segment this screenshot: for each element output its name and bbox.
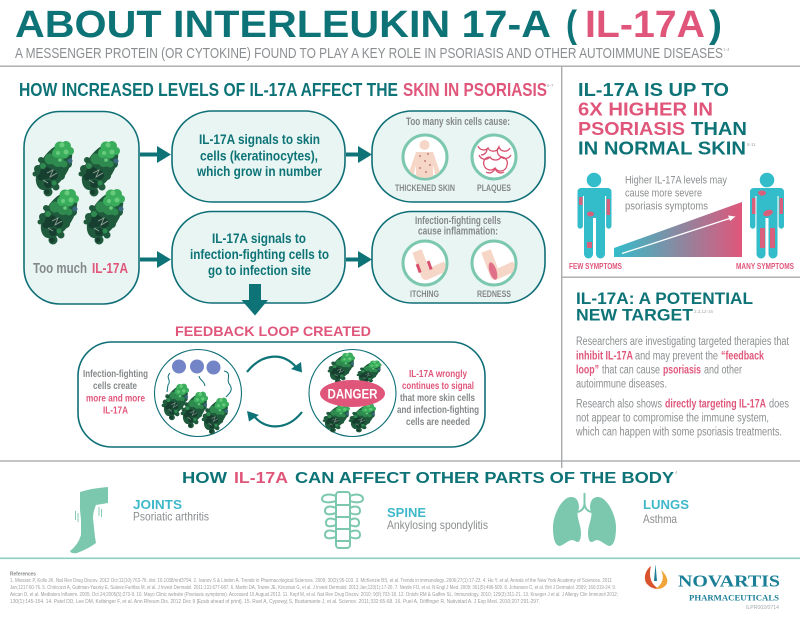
triangle: severity ramp <box>614 202 742 257</box>
text: researchers paragraph <box>576 336 790 390</box>
panel: infection-fighting cells cause inflammation: Infection-fighting cells <box>415 215 501 227</box>
heading: other parts of the body: HOW <box>182 470 228 487</box>
references: 1. Miossec P, Kolls JK. Nat Rev Drug Discov. 2012 Oct;11(10):763-76. doi: 10.1038/nrd3794. 2. Ivanov S & Linden A. Trends in Pharmacological Sciences. 2009; 30(2):95-103. 3. McKenzie BS, et al. Trends in immunology. 2006;27(1):17-23. 4. Hu Y, et al. Annals of the New York Academy of Sciences. 2011 <box>10 578 612 584</box>
text: IL-17A wrongly continues to signal: and infection-fighting <box>397 404 479 416</box>
panel: infection-fighting cells cause inflammation: cause inflammation: <box>418 226 498 238</box>
text: infection-fighting cells create more: Infection-fighting <box>83 368 148 380</box>
icon: cells producing IL-17A <box>154 350 242 436</box>
text: lungs <box>643 497 689 526</box>
subtitle: 1-4 <box>723 47 730 52</box>
text: infection-fighting cells create more: cells create <box>93 380 137 392</box>
text: IL-17A wrongly continues to signal: continues to signal <box>402 380 474 392</box>
logo: Novartis <box>645 564 780 611</box>
references: References <box>10 572 36 578</box>
text: researchers paragraph: “feedback <box>721 350 764 362</box>
text: higher levels note: psoriasis symptoms <box>625 200 708 212</box>
text: researchers paragraph: and may prevent the <box>635 350 718 362</box>
arrow: down to feedback loop <box>242 284 268 316</box>
heading: how increased levels affect the skin: 5-7 <box>547 83 554 88</box>
arrows between boxes <box>140 146 372 268</box>
heading: other parts of the body: 4 <box>675 470 678 475</box>
text: joints <box>133 497 209 524</box>
text: higher levels note: Higher IL-17A levels may <box>625 174 727 186</box>
heading: a potential new target: IL-17A: A POTENTIAL <box>576 289 753 308</box>
icon: person with many symptoms <box>750 173 784 258</box>
text: research also shows paragraph: does <box>769 398 789 410</box>
caption: redness: REDNESS <box>477 289 511 300</box>
text: IL-17A wrongly continues to signal: cells are needed <box>406 416 470 428</box>
references <box>10 572 618 605</box>
references: 130(1):145-154. 14. Patel DD, Lee DM, Kolbinger F, et al. Ann Rheum Dis. 2012 Dec 9 [Epub ahead of print]. 15. Ruel A, Cypowyj S, Bustamante J, et al. Science. 2011;332:65-68. 16. Puel A, Döffinger R, Natividad A. J Exp Med. 2010;207:291-297. <box>10 599 540 605</box>
text: researchers paragraph: autoimmune diseases. <box>576 378 667 390</box>
icon: person with few symptoms <box>578 173 612 258</box>
heading: feedback loop created: FEEDBACK LOOP CREATED <box>175 323 371 339</box>
heading: up to 6x higher: PSORIASIS <box>578 118 685 139</box>
panel: signals to infection-fighting cells <box>172 212 345 303</box>
panel: signals to infection-fighting cells: go to infection site <box>208 262 311 278</box>
logo: Novartis: NOVARTIS <box>678 572 780 590</box>
panel: signals to infection-fighting cells: infection-fighting cells to <box>190 246 329 262</box>
icon: spine <box>322 492 363 548</box>
text: infection-fighting cells create more: IL-17A <box>103 404 128 416</box>
icon: plaques <box>472 135 516 179</box>
label: too much IL-17A: IL-17A <box>92 261 128 277</box>
text: higher levels note: cause more severe <box>625 188 702 200</box>
panel: signals to skin cells <box>172 111 345 202</box>
heading: up to 6x higher: THAN <box>691 118 747 139</box>
text: spine: Ankylosing spondylitis <box>387 518 488 532</box>
panel: too many skin cells: Too many skin cells cause: <box>406 116 510 128</box>
text: IL-17A wrongly continues to signal <box>397 368 479 428</box>
text: researchers paragraph: psoriasis <box>663 364 701 376</box>
heading: up to 6x higher: 6X HIGHER IN <box>578 98 713 120</box>
text: researchers paragraph: and other <box>704 364 742 376</box>
heading: a potential new target <box>576 289 753 324</box>
heading: up to 6x higher: IL-17A IS UP TO <box>578 79 729 100</box>
text: IL-17A wrongly continues to signal: that more skin cells <box>400 392 475 404</box>
panel: too many skin cells <box>372 111 545 202</box>
panel: infection-fighting cells cause inflammation <box>372 212 545 303</box>
text: joints: Psoriatic arthritis <box>133 510 209 524</box>
heading: how increased levels affect the skin: SKIN IN PSORIASIS <box>403 80 547 100</box>
logo: Novartis: ILPR002/0714 <box>746 605 779 611</box>
heading: a potential new target: NEW TARGET <box>576 306 694 324</box>
icon: lungs <box>553 493 616 546</box>
text: researchers paragraph: that can cause <box>602 364 660 376</box>
heading: up to 6x higher <box>578 79 756 158</box>
heading: other parts of the body: IL-17A <box>234 470 288 487</box>
title: IL-17A <box>585 4 705 46</box>
logo: Novartis: PHARMACEUTICALS <box>689 592 779 602</box>
icon: leg joint <box>70 487 108 553</box>
caption: plaques: PLAQUES <box>477 183 511 194</box>
chart: symptom severity <box>569 173 794 271</box>
icon: four IL-17A proteins <box>28 138 131 244</box>
text: spine: SPINE <box>387 505 426 520</box>
badge: danger: DANGER <box>328 386 378 402</box>
title <box>15 4 722 46</box>
arrow: loop top <box>247 357 302 372</box>
panel: signals to skin cells: IL-17A signals to skin <box>199 131 320 147</box>
panel: signals to skin cells: cells (keratinocytes), <box>200 148 318 164</box>
icon: redness <box>472 241 516 285</box>
text: spine <box>387 505 488 532</box>
heading: up to 6x higher: IN NORMAL SKIN <box>578 138 746 158</box>
text: research also shows paragraph <box>575 398 789 438</box>
text: higher levels note <box>625 174 727 212</box>
text: researchers paragraph: inhibit IL-17A <box>576 350 633 362</box>
text: researchers paragraph: loop” <box>576 364 599 376</box>
heading: other parts of the body: CAN AFFECT OTHER PARTS OF THE BODY <box>295 470 674 487</box>
icon: thickened skin <box>403 135 447 182</box>
panel: signals to skin cells: which grow in number <box>196 163 322 179</box>
title: ABOUT INTERLEUKIN 17-A <box>15 4 551 46</box>
text: lungs: Asthma <box>643 512 677 526</box>
icon: Novartis flame <box>645 564 667 589</box>
text: lungs: LUNGS <box>643 497 689 512</box>
arrow: rising severity <box>622 216 736 254</box>
heading: a potential new target: 2,3,12-16 <box>694 309 714 314</box>
text: joints: JOINTS <box>133 497 182 512</box>
heading: other parts of the body <box>182 470 678 487</box>
panel: too much IL-17A <box>24 112 139 304</box>
references: Jan;1217:60-76. 5. Chiricozzi A, Guttman-Yassky E, Suárez-Fariñas M, et al. J Invest Dermatol. 2011;131:677-687. 6. Martin DA, Towne JE, Kricorian G, et al. J Invest Dermatol. 2013 Jan;133(1):17-26. 7. Nestle FO, et al. N Engl J Med. 2009; 361(5):496-509. 8. Johansen C, et al. Brit J Dermatol. 2009; 160:319-24. 9. <box>10 585 616 591</box>
caption: thickened skin: THICKENED SKIN <box>395 183 455 194</box>
text: infection-fighting cells create more <box>83 368 148 416</box>
heading: how increased levels affect the skin: HOW INCREASED LEVELS OF IL-17A AFFECT THE <box>19 80 398 100</box>
icon: itching <box>403 241 447 285</box>
label: too much IL-17A: Too much <box>33 261 87 277</box>
label: few symptoms: FEW SYMPTOMS <box>569 261 622 271</box>
title: ( <box>566 4 577 46</box>
text: IL-17A wrongly continues to signal: IL-17A wrongly <box>409 368 467 380</box>
panel: feedback loop <box>78 342 485 447</box>
heading: up to 6x higher: 8-11 <box>747 142 756 147</box>
text: research also shows paragraph: Research also shows <box>576 398 662 410</box>
text: infection-fighting cells create more: more and more <box>86 392 145 404</box>
panel: signals to infection-fighting cells: IL-17A signals to <box>212 230 306 246</box>
caption: itching: ITCHING <box>410 289 439 300</box>
title: ) <box>709 4 722 46</box>
references: Arican O, et al. Mediators Inflamm. 2005; Oct 24;2005(5):273-9. 10. Mayo Clinic website (Psoriasis symptoms). Accessed 15 August 2013. 11. Kopf M, et al. Nat Rev Drug Discov. 2010; 9(9):703-18. 12. Onishi RM & Gaffen SL. Immunology. 2010; 129(3):311-21. 13. Krueger J et al. J Allergy Clin Immunol 2012; <box>10 592 618 598</box>
text: research also shows paragraph: directly targeting IL-17A <box>665 398 766 410</box>
icon: danger circle <box>309 350 396 436</box>
arrow: loop bottom <box>247 411 302 426</box>
